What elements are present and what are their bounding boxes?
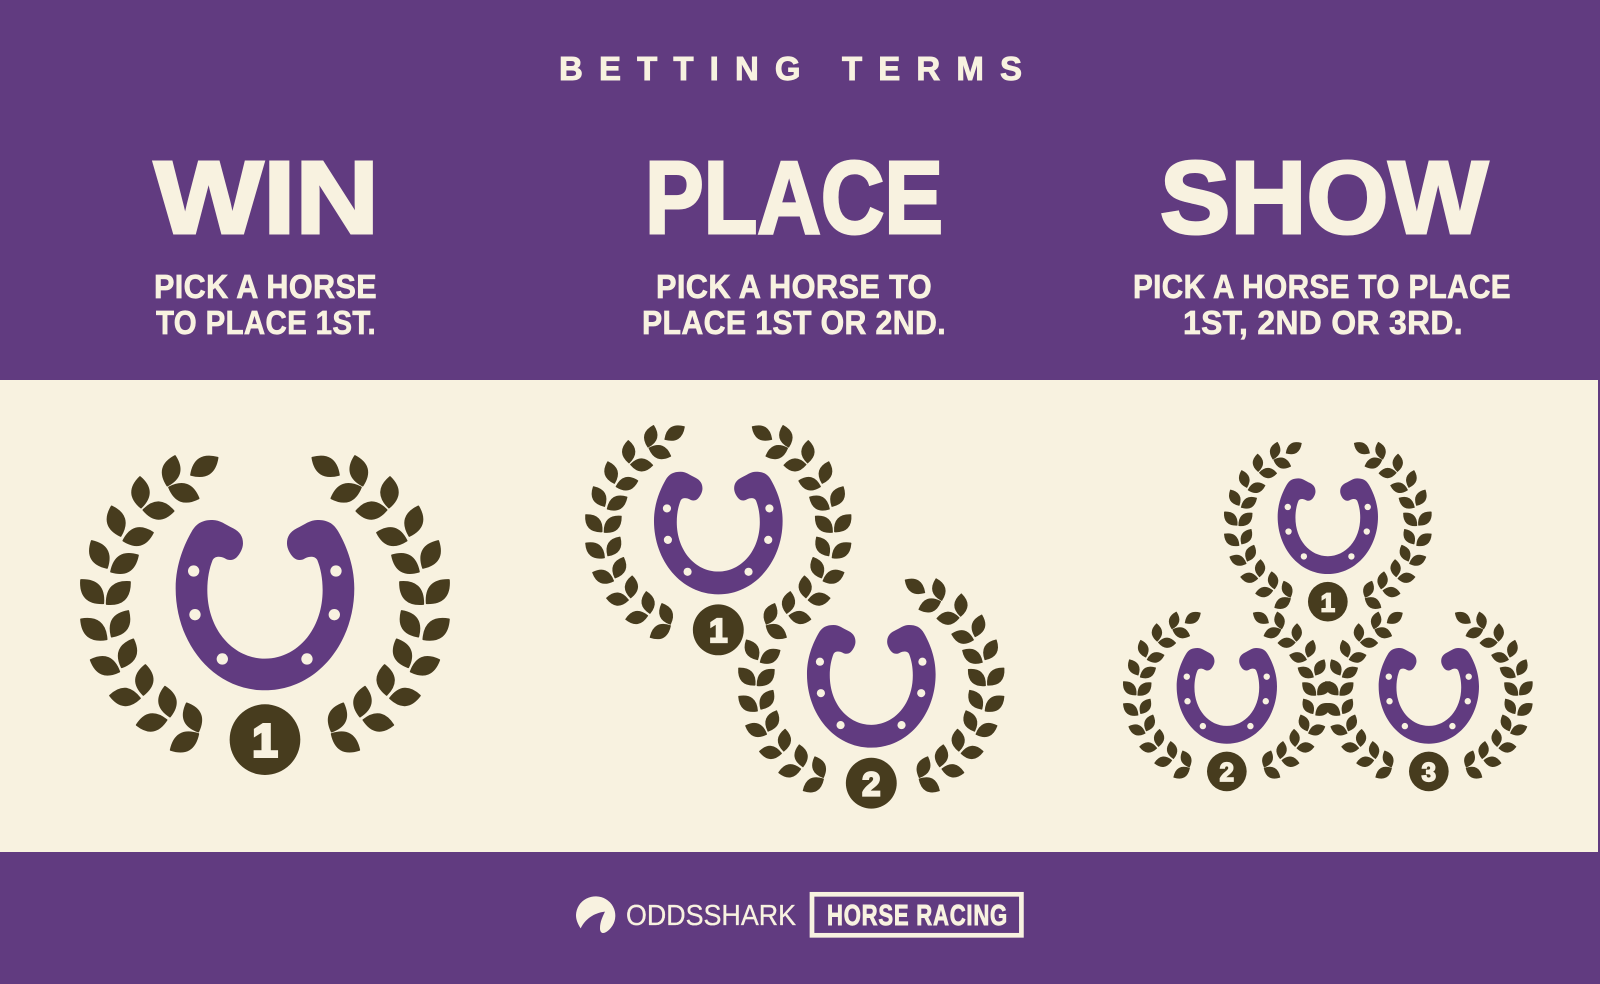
icon: show laurel with horseshoe, rank 2: 2 (1220, 759, 1234, 787)
icon: show laurel with horseshoe, rank 3 (1325, 612, 1532, 791)
heading: show: SHOW (1160, 140, 1489, 255)
icon: show laurel with horseshoe, rank 1: 1 (1321, 589, 1335, 617)
heading: place: PLACE (645, 140, 943, 255)
badge: horse racing: HORSE RACING (827, 900, 1008, 932)
panel: cream illustration band (0, 380, 1598, 852)
text block: win description (154, 268, 377, 341)
icon: place laurel with horseshoe, rank 1 (586, 426, 851, 655)
heading: win: WIN (154, 140, 379, 255)
icon: win laurel with horseshoe, rank 1: 1 (252, 715, 278, 767)
text block: show description: 1ST, 2ND OR 3RD. (1183, 304, 1463, 341)
icon: show laurel with horseshoe, rank 3: 3 (1422, 759, 1436, 787)
text block: place description: PLACE 1ST OR 2ND. (642, 304, 946, 341)
title: BETTING TERMS (559, 50, 1022, 87)
text block: win description: PICK A HORSE (154, 268, 377, 305)
icon: show laurel with horseshoe, rank 1 (1224, 442, 1431, 622)
badge: horse racing (812, 894, 1021, 935)
text block: show description: PICK A HORSE TO PLACE (1133, 268, 1511, 305)
logo text: oddsshark: ODDSSHARK (626, 900, 797, 932)
text block: place description: PICK A HORSE TO (656, 268, 932, 305)
icon: oddsshark logo mark (576, 896, 615, 933)
icon: show laurel with horseshoe, rank 2 (1123, 612, 1330, 791)
icon: place laurel with horseshoe, rank 2 (739, 579, 1004, 809)
icon: win laurel with horseshoe, rank 1 (81, 456, 449, 775)
icon: place laurel with horseshoe, rank 1: 1 (709, 613, 728, 650)
text block: win description: TO PLACE 1ST. (156, 304, 376, 341)
text block: show description (1133, 268, 1511, 341)
icon: place laurel with horseshoe, rank 2: 2 (862, 766, 881, 803)
text block: place description (642, 268, 946, 341)
